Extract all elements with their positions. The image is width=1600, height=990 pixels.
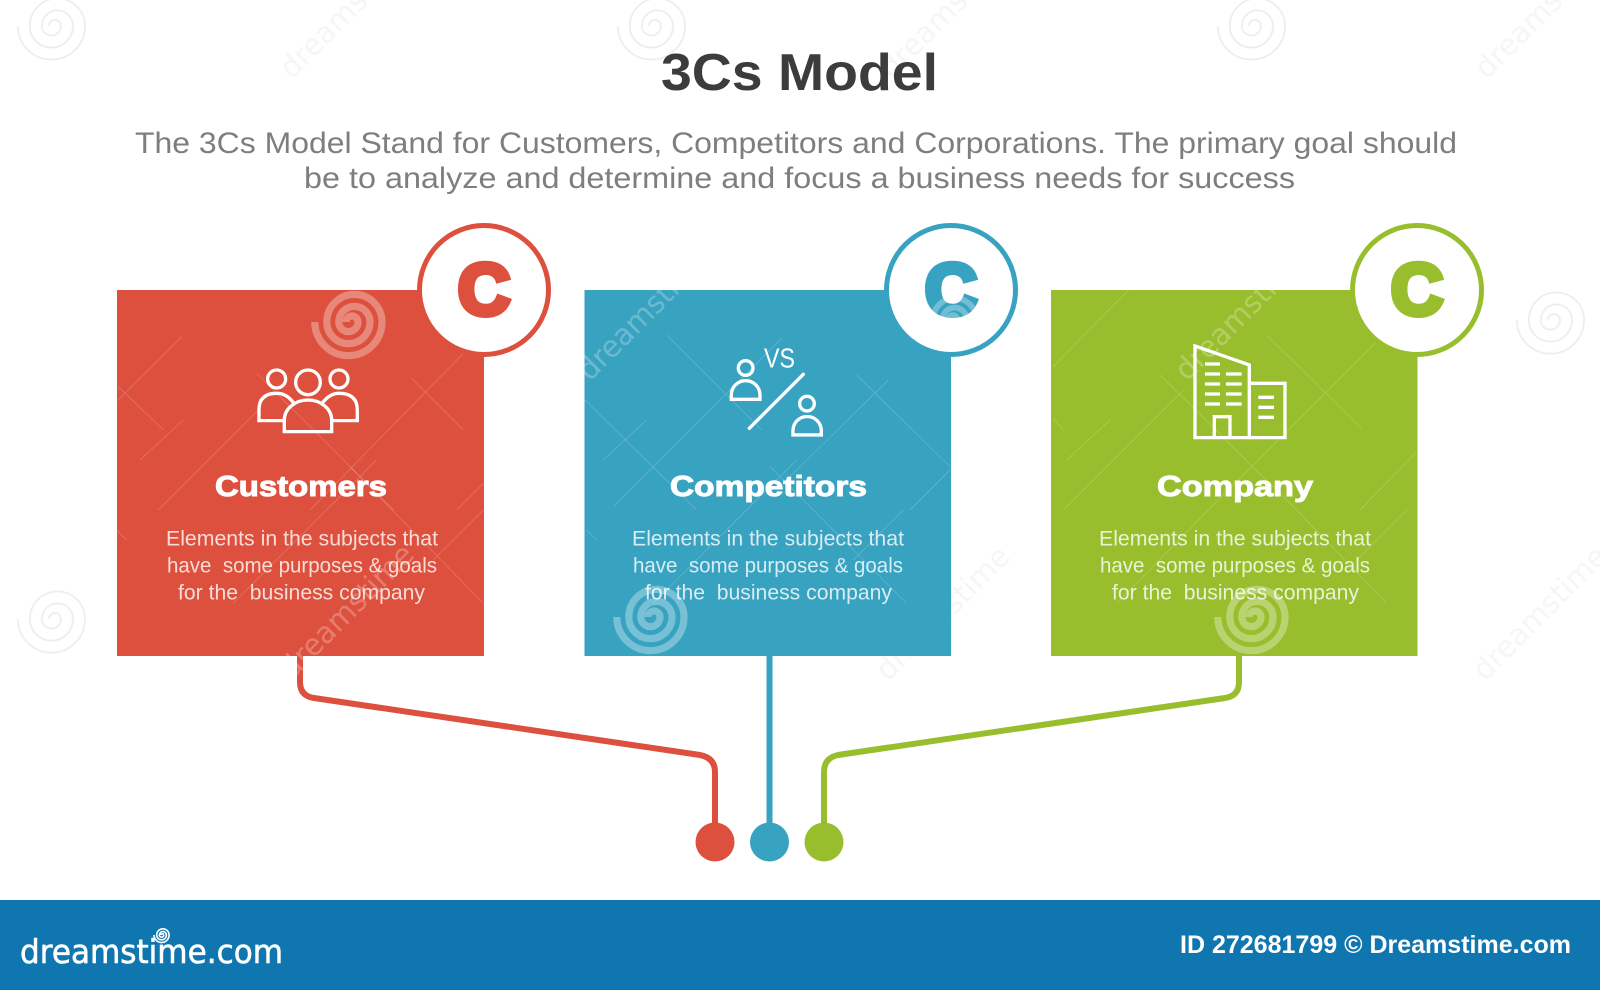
- text: competitors description: for the business company: [645, 582, 892, 604]
- badge: company C: C: [1391, 250, 1443, 330]
- text: customers description: for the business company: [178, 582, 425, 604]
- text: competitors description: Elements in the subjects that: [632, 528, 904, 550]
- footer logo: dreamstime.com: [20, 932, 283, 971]
- icon: building: [1195, 346, 1285, 438]
- panel: competitors: [571, 226, 1016, 656]
- text: company description: [1099, 528, 1371, 604]
- panel: competitors: dreamstime: [571, 239, 719, 388]
- panel: company: [1051, 226, 1482, 656]
- connector: company: [804, 650, 1239, 862]
- footer id: ID 272681799 © Dreamstime.com: [1180, 931, 1571, 959]
- footer bar: [0, 900, 1600, 990]
- text: company description: for the business company: [1112, 582, 1359, 604]
- badge: customers C: [420, 226, 548, 354]
- badge: competitors C: [886, 226, 1016, 354]
- title: 3Cs Model: [661, 44, 938, 102]
- badge: customers C: C: [458, 250, 510, 330]
- badge: company C: [1352, 226, 1482, 354]
- subtitle text: be to analyze and determine and focus a business needs for success: [304, 162, 1295, 195]
- connector: customers: [300, 650, 734, 862]
- text: competitors description: [632, 528, 904, 604]
- text: company description: have some purposes & goals: [1100, 554, 1370, 578]
- icon: customers group: [259, 370, 357, 432]
- text: customers description: [166, 528, 438, 604]
- subtitle text: The 3Cs Model Stand for Customers, Competitors and Corporations. The primary goal should: [135, 127, 1457, 160]
- heading: competitors: Competitors: [670, 471, 867, 503]
- panel: customers: dreamstime: [273, 537, 421, 686]
- badge: competitors C: C: [925, 250, 977, 330]
- subtitle text: [135, 127, 1457, 195]
- heading: company: Company: [1157, 471, 1313, 503]
- icon: versus: [731, 342, 821, 435]
- text: dreamstime: [869, 539, 1017, 688]
- icon: versus: VS: [764, 342, 795, 373]
- panel: customers: [117, 226, 548, 686]
- text: customers description: have some purposes & goals: [167, 554, 437, 578]
- heading: customers: Customers: [215, 471, 387, 503]
- text: customers description: Elements in the subjects that: [166, 528, 438, 550]
- text: competitors description: have some purposes & goals: [633, 554, 903, 578]
- text: company description: Elements in the subjects that: [1099, 528, 1371, 550]
- panel: company: dreamstime: [1168, 239, 1316, 388]
- connector: competitors: [750, 650, 789, 862]
